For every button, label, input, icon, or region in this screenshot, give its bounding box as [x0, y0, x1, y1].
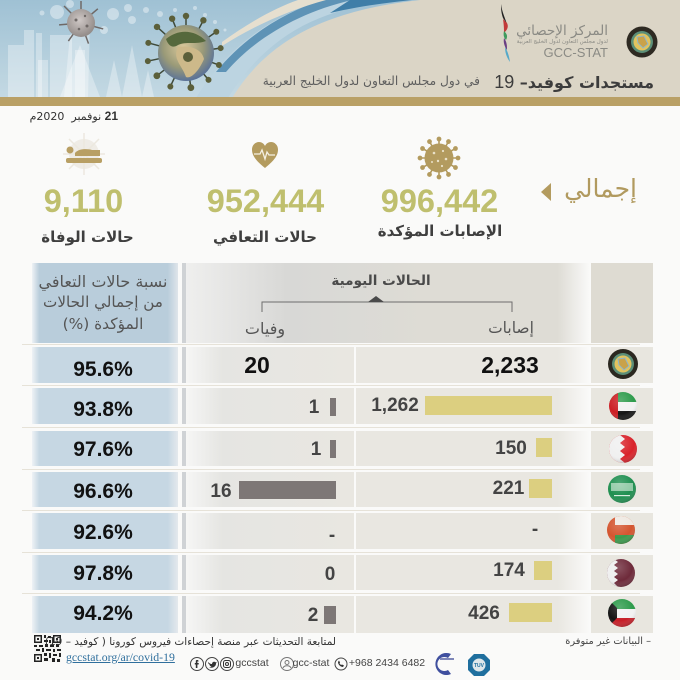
- flag: Saudi: [608, 475, 636, 503]
- value: 1: [311, 439, 321, 460]
- bar: [534, 561, 552, 580]
- globe virus: [144, 13, 224, 91]
- line 1: نسبة حالات التعافي: [38, 272, 167, 291]
- bar: [509, 603, 552, 622]
- value: 150: [495, 438, 527, 459]
- icon: confirmed virus: [418, 136, 460, 180]
- icon: instagram: [220, 658, 234, 670]
- Bahrain cases bar chart: [495, 438, 552, 459]
- Bahrain deaths bar chart: [311, 439, 336, 460]
- footer: gcc-stat handle: gcc-stat: [293, 657, 329, 669]
- bar: [529, 479, 552, 498]
- icon: GCC emblem: [626, 26, 658, 58]
- logo arabic name: المركز الإحصائي: [516, 23, 608, 39]
- flag: UAE: [609, 392, 637, 420]
- Saudi cases bar chart: [493, 478, 552, 499]
- footer: gccstat handle: gccstat: [235, 657, 269, 669]
- Oman cases: -: [532, 519, 538, 540]
- Kuwait deaths bar chart: [308, 605, 336, 626]
- icon: QR code: [34, 635, 61, 662]
- line 3: المؤكدة (%): [63, 315, 143, 333]
- column heading: cases: إصابات: [488, 319, 534, 337]
- header: daily background: [186, 263, 590, 343]
- footer: phone: +968 2434 6482: [349, 657, 425, 669]
- icon: whatsapp: [335, 658, 347, 670]
- ribbon logo: [501, 4, 510, 62]
- icon: TUV logo: [468, 654, 490, 676]
- subtitle: في دول مجلس التعاون لدول الخليج العربية: [263, 74, 480, 88]
- stat: recovered number: 952,444: [207, 183, 324, 219]
- stat: deaths number: 9,110: [44, 183, 123, 219]
- icon: linkedin-like user: [280, 658, 294, 670]
- Kuwait: 94.2%: [73, 602, 133, 625]
- Saudi: 96.6%: [73, 480, 133, 503]
- Kuwait cases bar chart: [468, 603, 552, 624]
- row: Oman background: [32, 513, 653, 549]
- stat: deaths label: حالات الوفاة: [41, 228, 134, 246]
- header: flag background: [591, 263, 653, 343]
- skyline: [8, 20, 154, 97]
- bar: [330, 398, 336, 416]
- header banner: [0, 0, 680, 106]
- row: Kuwait background: [32, 596, 653, 633]
- value: 16: [210, 481, 232, 502]
- row: GCC background: [32, 347, 653, 383]
- flag: Bahrain: [609, 435, 637, 463]
- UAE deaths bar chart: [309, 397, 336, 418]
- flags column: [607, 349, 638, 627]
- column separators: [182, 263, 186, 343]
- GCC cases: 2,233: [481, 352, 539, 378]
- value: 2: [308, 605, 318, 626]
- Qatar: 97.8%: [73, 562, 133, 585]
- row: UAE background: [32, 388, 653, 424]
- icon: heart: [252, 142, 278, 168]
- icon: facebook: [190, 658, 204, 670]
- bar: [324, 606, 336, 624]
- arrow: totals pointer: [541, 183, 551, 201]
- bubbles: [40, 0, 226, 34]
- title: مستجدات كوفيد– 19: [494, 72, 654, 92]
- GCC: 95.6%: [73, 358, 133, 381]
- column heading: daily cases: الحالات اليومية: [331, 273, 431, 289]
- Saudi deaths bar chart: [210, 481, 336, 502]
- Oman: 92.6%: [73, 521, 133, 544]
- Qatar deaths: 0: [325, 564, 335, 585]
- footer: follow updates text: لمتابعة التحديثات عبر منصة إحصاءات فيروس كورونا ( كوفيد – 19): [45, 636, 336, 648]
- date: 21 نوفمبر 2020م: [30, 109, 118, 123]
- recovery percentages: [73, 358, 133, 625]
- grey virus: [59, 1, 103, 44]
- icon: twitter: [206, 658, 218, 670]
- UAE cases bar chart: [371, 395, 552, 416]
- stat: recovered label: حالات التعافي: [213, 228, 317, 246]
- row: Saudi background: [32, 472, 653, 507]
- Qatar cases bar chart: [493, 560, 552, 581]
- value: 426: [468, 603, 500, 624]
- row: Qatar background: [32, 555, 653, 590]
- totals heading: إجمالي: [564, 174, 637, 203]
- logo subtitle: لدول مجلس التعاون لدول الخليج العربية: [517, 39, 608, 45]
- bar: [536, 438, 552, 457]
- icon: bed patient: [63, 133, 105, 175]
- footer: not available note: – البيانات غير متوفرة: [565, 636, 651, 647]
- header: recovery ratio background: [32, 263, 178, 343]
- column heading: deaths: وفيات: [245, 319, 285, 338]
- Oman deaths: -: [329, 525, 335, 546]
- panel: table header: [32, 263, 653, 343]
- UAE: 93.8%: [73, 398, 133, 421]
- GCC deaths: 20: [244, 352, 270, 378]
- icon: TUV logo: TUV: [474, 663, 485, 669]
- value: 1,262: [371, 395, 419, 416]
- gold band: [0, 97, 680, 106]
- bar: [425, 396, 552, 415]
- flag: Kuwait: [608, 599, 636, 627]
- flag: Oman: [607, 516, 635, 544]
- footer: link: gccstat.org/ar/covid-19: [66, 650, 175, 664]
- Bahrain: 97.6%: [73, 438, 133, 461]
- value: 221: [493, 478, 524, 499]
- stat: confirmed label: الإصابات المؤكدة: [378, 222, 502, 240]
- icon: certification logo C: [435, 653, 454, 675]
- column heading: recovery ratio: [38, 272, 167, 333]
- table rows background: [32, 347, 653, 633]
- row: Bahrain background: [32, 431, 653, 466]
- value: 1: [309, 397, 319, 418]
- bar: [239, 481, 336, 499]
- bracket: [262, 296, 512, 312]
- bar: [330, 440, 336, 458]
- flag: GCC: [608, 349, 638, 379]
- logo GCC-STAT: GCC-STAT: [543, 45, 608, 60]
- swoosh: [232, 0, 680, 98]
- value: 174: [493, 560, 525, 581]
- footer: social icons: [190, 657, 348, 671]
- flag: Qatar: [607, 559, 635, 587]
- stat: confirmed number: 996,442: [381, 183, 498, 219]
- line 2: من إجمالي الحالات: [43, 293, 163, 311]
